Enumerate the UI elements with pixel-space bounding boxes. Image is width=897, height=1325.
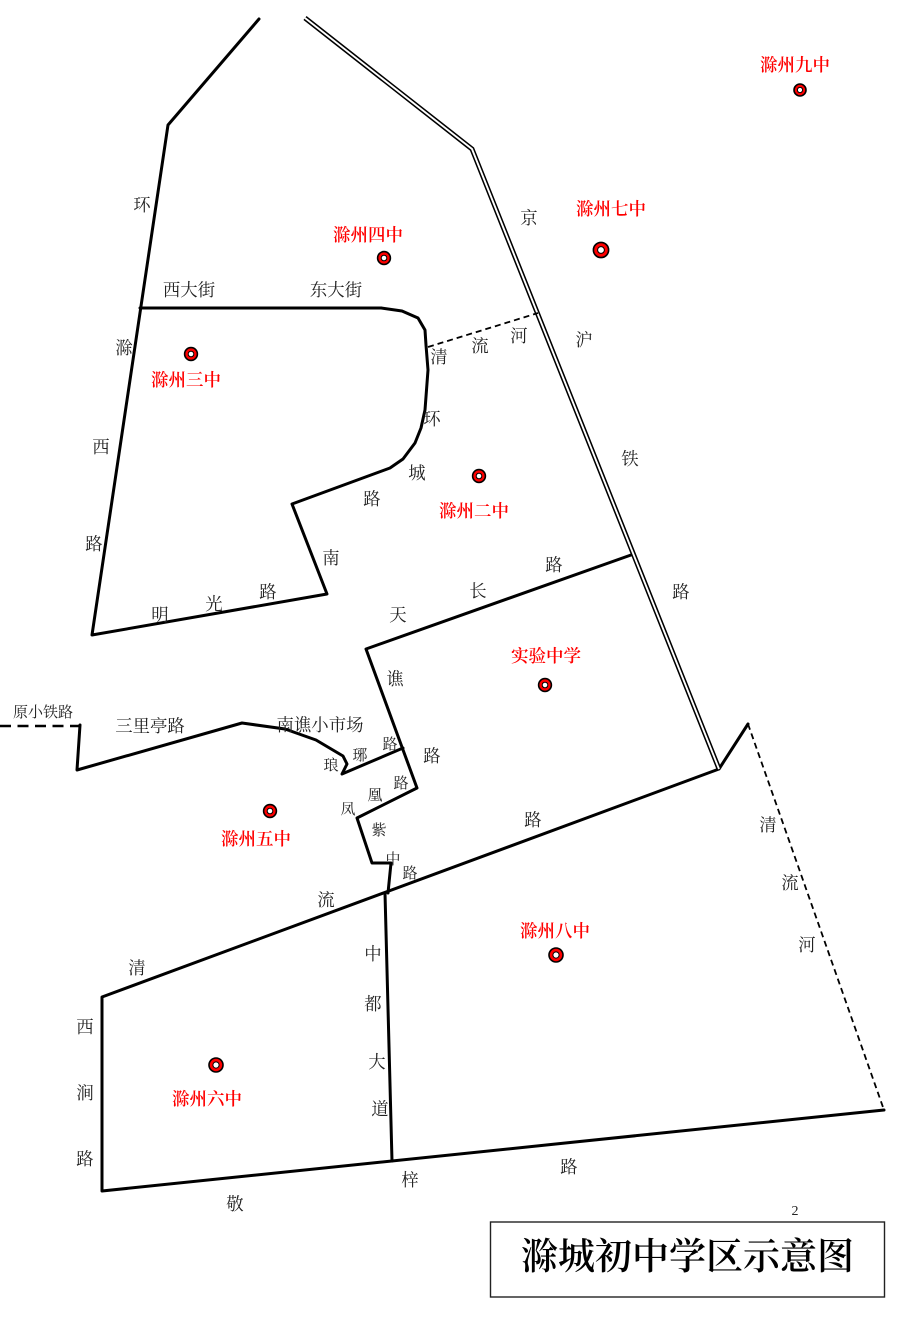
school markers [185,84,806,1072]
label: Beijing-Shanghai railway: 沪 [575,330,593,350]
label: Jingzi road [226,1157,578,1214]
label: Mingguang road [151,582,277,625]
marker: school 3 [185,348,197,360]
label: Qiao road: 谯 [386,669,404,689]
marker: school 9 [794,84,806,96]
label: west ring road: 路 [85,534,103,554]
label: Beijing-Shanghai railway: 铁 [621,449,639,469]
label: Zhongdu avenue: 大 [368,1052,386,1072]
marker: school 8 [549,948,563,962]
label: Nanqiao small market: 南谯小市场 [277,715,363,735]
label: south ring city road: 南 [322,548,340,568]
name: experimental school: 实验中学 [511,646,581,666]
label: old small railway: 原小铁路 [13,704,73,721]
name: school 5: 滁州五中 [221,829,291,849]
label: south ring city road [322,409,441,568]
road: northwest ring road [92,19,428,635]
label: Fenghuang road: 路 [393,775,409,792]
label: Qingliu road: 清 [128,958,146,978]
label: Qingliu river east [759,815,816,955]
label: Tianchang road: 路 [545,555,563,575]
name: school 8: 滁州八中 [520,921,590,941]
label: Fenghuang road: 凰 [367,787,383,804]
river: Qingliu east section [748,724,884,1110]
label: Qingliu river north [430,326,528,367]
label: Zhongdu avenue [364,944,389,1119]
page number: 2 [792,1204,798,1219]
marker: school 4 [378,252,390,264]
road: Langya road [77,723,403,774]
label: Qiao road [386,669,441,766]
road: Tianchang road to Ziwei [357,555,631,893]
label: Qingliu river north: 清 [430,347,448,367]
label: Zizhong road: 中 [385,851,401,868]
label: Beijing-Shanghai railway [520,208,690,602]
label: Qingliu river north: 河 [510,326,528,346]
marker: school 5 [264,805,276,817]
label: Tianchang road: 长 [469,581,487,601]
river: Qingliu upper section [428,313,538,347]
label: Langya road: 琊 [352,747,368,764]
label: Zizhong road: 紫 [371,821,387,839]
label: Qingliu river east: 河 [798,935,816,955]
marker: school 6 [209,1058,223,1072]
label: west ring road: 滁 [115,338,133,358]
road: Qingliu road [102,724,884,1191]
label: west ring road: 西 [92,437,110,457]
label: Beijing-Shanghai railway: 京 [520,208,538,228]
label: Xijian road: 路 [76,1149,94,1169]
label: Jingzi road: 敬 [226,1194,244,1214]
label: south ring city road: 路 [363,489,381,509]
label: Zizhong road: 路 [402,865,418,882]
label: Qingliu road: 路 [524,810,542,830]
school names [151,55,830,1109]
label: Qiao road: 路 [423,746,441,766]
label: Xijian road [76,1017,94,1169]
road labels [13,195,816,1214]
label: west ring road: 环 [133,195,151,215]
title: 滁城初中学区示意图 [521,1236,854,1278]
label: Mingguang road: 路 [259,582,277,602]
label: Xijian road: 西 [76,1017,94,1037]
label: Zhongdu avenue: 道 [371,1099,389,1119]
label: Xijian road: 涧 [76,1083,94,1103]
label: Langya road: 琅 [323,756,339,774]
label: west ring road [85,195,151,554]
title box [490,1222,884,1297]
road: Zhongdu avenue [385,893,392,1161]
name: school 9: 滁州九中 [760,55,830,75]
label: Jingzi road: 梓 [401,1170,419,1190]
label: south ring city road: 城 [408,463,426,483]
name: school 3: 滁州三中 [151,370,221,390]
label: Sanliting road: 三里亭路 [115,716,185,736]
name: school 6: 滁州六中 [172,1089,242,1109]
label: Mingguang road: 光 [205,594,223,614]
label: south ring city road: 环 [423,409,441,429]
label: Langya road: 路 [382,736,398,753]
label: Qingliu river north: 流 [471,336,489,356]
label: Qingliu river east: 清 [759,815,777,835]
label: Fenghuang road [340,775,409,818]
label: Langya road [323,736,398,774]
road: west and east main street [140,306,381,310]
label: Jingzi road: 路 [560,1157,578,1177]
label: Tianchang road: 天 [389,605,407,625]
label: east main street: 东大街 [310,280,362,300]
marker: school 7 [593,242,609,258]
label: Qingliu river east: 流 [781,873,799,893]
label: west main street: 西大街 [163,280,215,300]
label: Zizhong road [371,821,418,882]
label: Mingguang road: 明 [151,605,169,625]
marker: school 2 [473,470,485,482]
label: Qingliu road: 流 [317,890,335,910]
label: Tianchang road [389,555,563,625]
railway: Beijing-Shanghai [305,18,719,769]
label: Beijing-Shanghai railway: 路 [672,582,690,602]
label: Zhongdu avenue: 中 [364,944,382,964]
label: Qingliu road [128,810,542,978]
name: school 2: 滁州二中 [439,501,509,521]
label: Fenghuang road: 凤 [340,801,356,818]
old small railway [0,725,79,727]
name: school 4: 滁州四中 [333,225,403,245]
name: school 7: 滁州七中 [576,199,646,219]
label: Zhongdu avenue: 都 [364,994,382,1014]
marker: experimental school [539,679,551,691]
